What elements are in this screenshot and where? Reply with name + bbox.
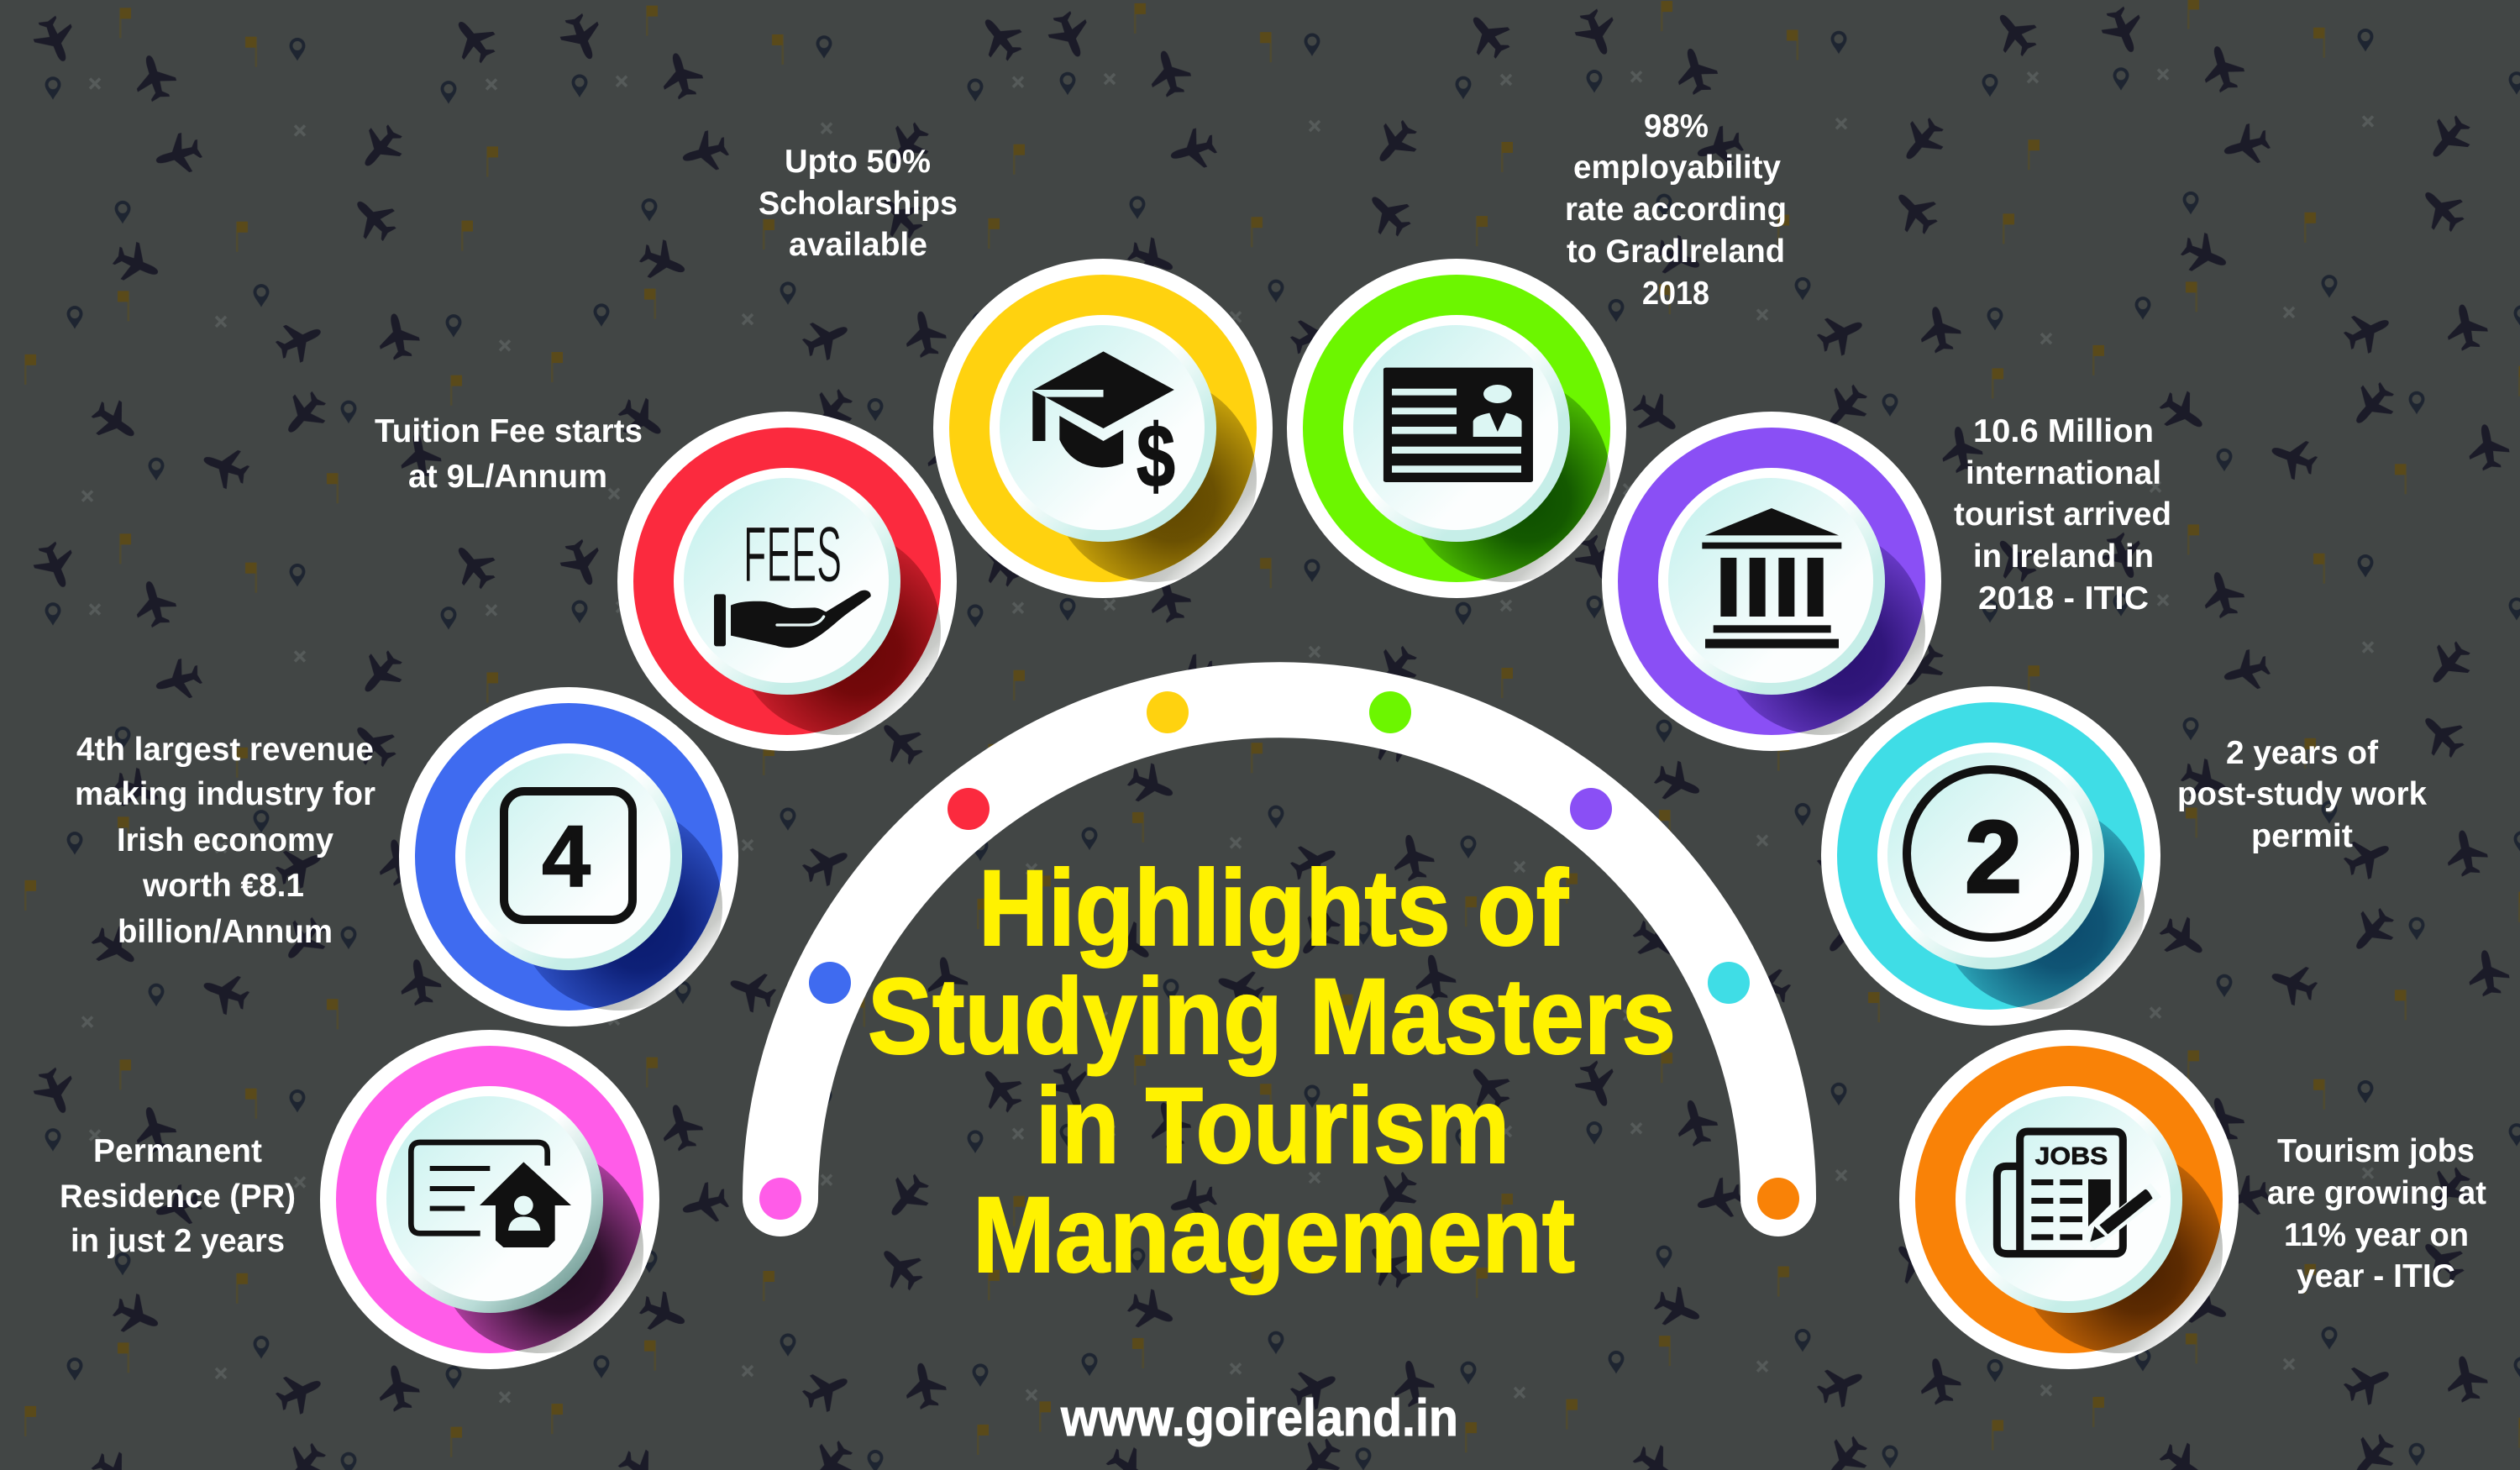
icon: number 4 in rounded square	[504, 791, 633, 920]
text block: tourist arrivals: 10.6 Million	[1973, 413, 2154, 449]
text block: tourism jobs: are growing at	[2267, 1175, 2486, 1211]
text block: permanent residence: Permanent	[93, 1133, 262, 1169]
text block: work permit	[2177, 735, 2427, 854]
text block: revenue	[75, 732, 375, 950]
panel: number 4 badge	[399, 687, 738, 1026]
text block: revenue: making industry for	[75, 776, 375, 812]
icon: fees text with hand: FEES	[743, 510, 842, 598]
icon: newspaper with pencil: JOBS	[2035, 1143, 2108, 1170]
text block: scholarships	[759, 144, 958, 263]
text block: tourism jobs: Tourism jobs	[2277, 1133, 2475, 1169]
text block: work permit: post-study work	[2177, 776, 2427, 812]
icon: number 2 in circle	[1907, 769, 2075, 937]
text block: employability: rate according	[1565, 192, 1787, 228]
text block: permanent residence	[60, 1133, 296, 1259]
panel: permanent residence badge	[320, 1030, 659, 1369]
text block: tourist arrivals: tourist arrived	[1954, 496, 2171, 533]
text block: work permit: 2 years of	[2226, 735, 2379, 771]
text block: tourist arrivals: international	[1966, 455, 2161, 491]
icon: card with house	[411, 1142, 571, 1247]
text block: employability: 2018	[1642, 276, 1709, 312]
text block: permanent residence: Residence (PR)	[60, 1179, 296, 1215]
icon: graduation cap with dollar: $	[1137, 407, 1175, 506]
text block: tuition fee	[375, 413, 643, 495]
icon: number 4 in rounded square: 4	[542, 808, 591, 906]
text block: tourist arrivals: in Ireland in	[1973, 538, 2154, 575]
title: Studying Masters	[868, 957, 1676, 1077]
text block: revenue: billion/Annum	[118, 914, 333, 950]
icon: newspaper with pencil	[1997, 1131, 2156, 1254]
text block: scholarships: Upto 50%	[785, 144, 931, 180]
website url: www.goireland.in	[1060, 1389, 1458, 1447]
text block: tourism jobs: 11% year on	[2284, 1217, 2469, 1253]
text block: tourist arrivals: 2018 - ITIC	[1978, 580, 2149, 617]
text block: work permit: permit	[2251, 818, 2353, 854]
text block: revenue: worth €8.1	[142, 868, 304, 904]
panel: fees badge	[617, 412, 957, 751]
title: Highlights of	[979, 848, 1568, 969]
text block: revenue: 4th largest revenue	[76, 732, 374, 768]
icon: classical building	[1702, 508, 1841, 648]
text block: employability	[1565, 108, 1787, 312]
text block: tuition fee: at 9L/Annum	[408, 459, 607, 495]
title: Management	[973, 1175, 1575, 1295]
text block: employability: to GradIreland	[1567, 234, 1785, 270]
icon: id card	[1383, 368, 1533, 482]
icon: graduation cap with dollar	[1032, 351, 1175, 506]
text block: scholarships: available	[789, 227, 927, 263]
text block: revenue: Irish economy	[117, 822, 333, 858]
panel: employability badge	[1287, 259, 1626, 598]
text block: tourism jobs	[2267, 1133, 2486, 1294]
arch track with coloured dots	[759, 691, 1799, 1220]
icon: number 2 in circle: 2	[1965, 800, 2022, 914]
panel: jobs badge	[1899, 1030, 2239, 1369]
title	[868, 848, 1676, 1295]
text block: tourist arrivals	[1954, 413, 2171, 617]
panel: tourist arrivals badge	[1602, 412, 1941, 751]
text block: employability: 98%	[1644, 108, 1709, 144]
text block: employability: employability	[1573, 150, 1781, 186]
text block: permanent residence: in just 2 years	[71, 1223, 285, 1259]
panel: scholarship badge	[933, 259, 1273, 598]
text block: tuition fee: Tuition Fee starts	[375, 413, 643, 449]
text block: scholarships: Scholarships	[759, 186, 958, 222]
icon: fees text with hand	[714, 510, 871, 648]
panel: number 2 badge	[1821, 686, 2160, 1026]
text block: tourism jobs: year - ITIC	[2297, 1258, 2455, 1294]
title: in Tourism	[1036, 1066, 1509, 1186]
